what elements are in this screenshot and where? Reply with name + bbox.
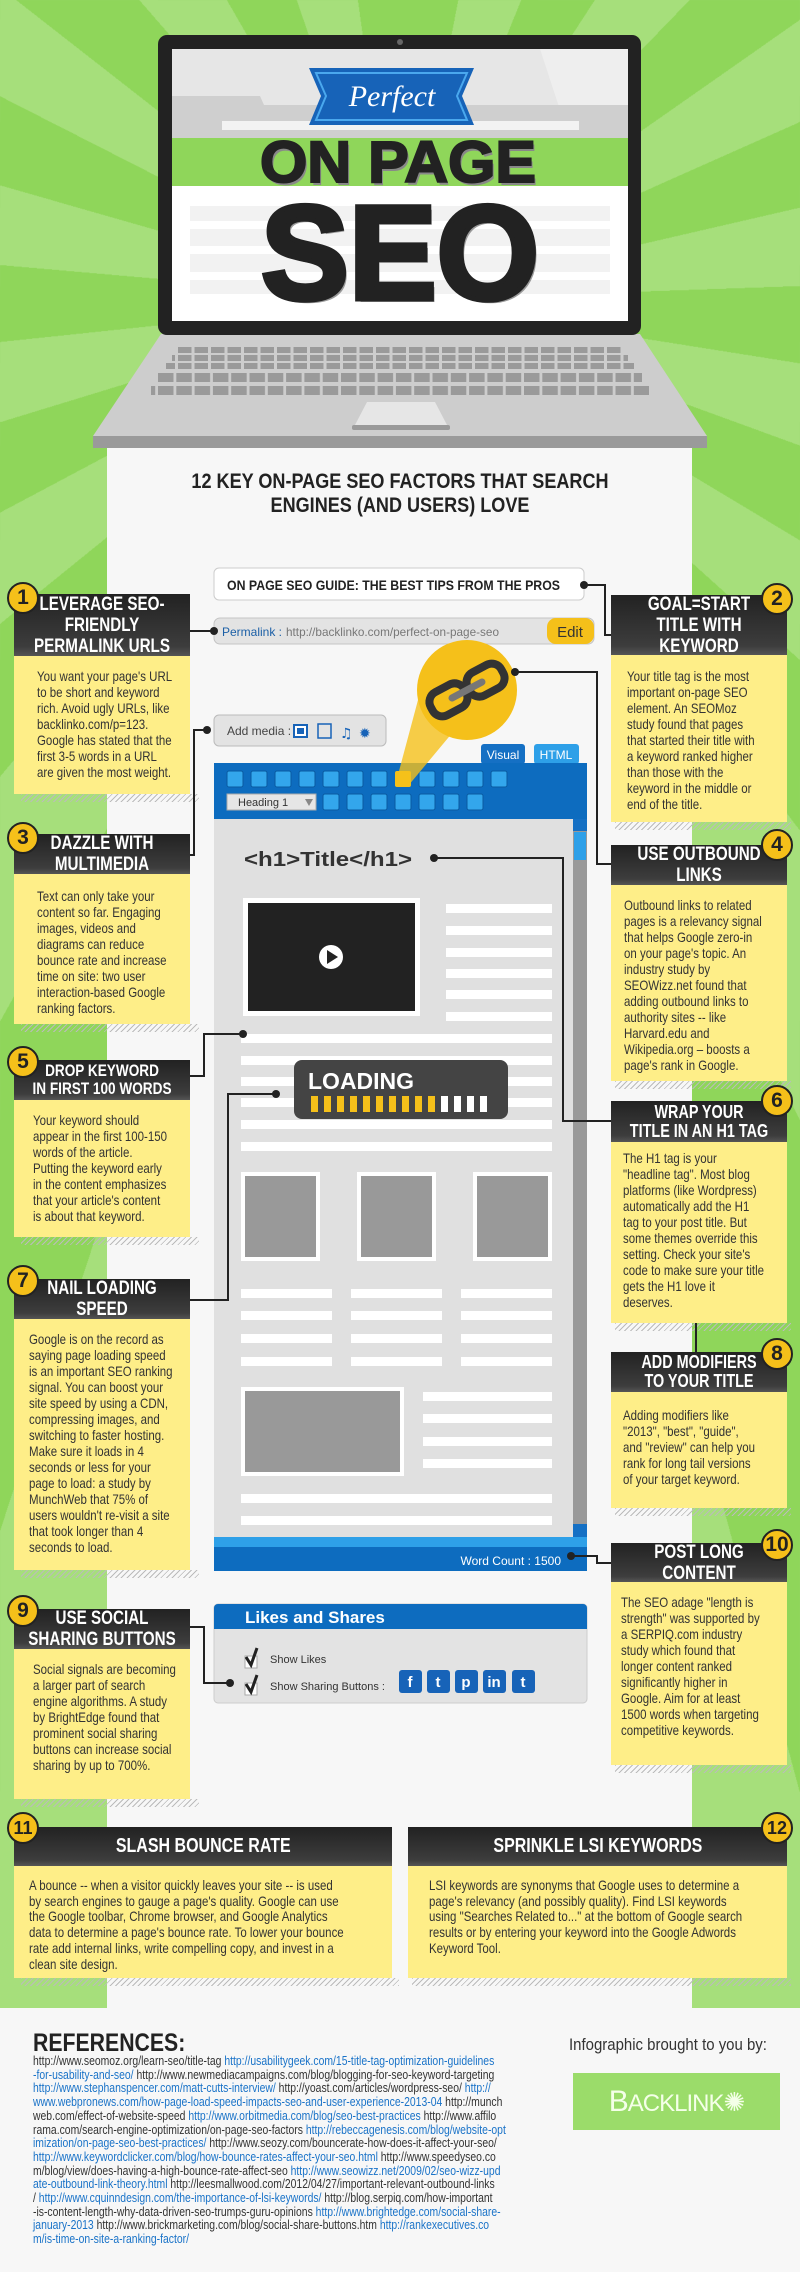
panel 2: title keyword: important on-page SEO — [627, 684, 748, 700]
references list: m/blog/view/does-having-a-high-bounce-rate-affect-seo http://www.seowizz.net/2009/02/seo-wizz-upd — [33, 2163, 500, 2178]
panel 4: outbound links: SEOWizz.net found that — [624, 977, 747, 993]
subtitle: 12 KEY ON-PAGE SEO FACTORS THAT SEARCH — [191, 470, 609, 493]
panel 7: loading speed: 7 — [17, 1269, 29, 1292]
panel 9: social sharing: prominent social sharing — [33, 1725, 157, 1741]
panel 10: long content: The SEO adage "length is — [621, 1594, 753, 1610]
panel 2: title keyword: TITLE WITH — [656, 614, 742, 636]
panel 2: title keyword: that started their title with — [627, 732, 755, 748]
panel 12: LSI keywords: SPRINKLE LSI KEYWORDS — [493, 1835, 702, 1857]
panel 6: h1 tag: deserves. — [623, 1294, 673, 1310]
panel 7: loading speed: switching to faster hosting. — [29, 1427, 164, 1443]
panel 5: keyword first 100 words: that your article's content — [33, 1192, 160, 1208]
likes and shares box: Show Likes — [270, 1654, 327, 1666]
panel 5: keyword first 100 words: words of the article. — [33, 1144, 133, 1160]
panel 1: permalink urls — [7, 582, 199, 802]
panel 3: multimedia: time on site: two user — [37, 968, 145, 984]
panel 7: loading speed: MunchWeb that 75% of — [29, 1491, 148, 1507]
panel 11: bounce rate — [7, 1812, 399, 1986]
title: ON PAGE: ON PAGE — [260, 130, 536, 195]
add media box: Add media : — [227, 724, 291, 738]
panel 7: loading speed: page to load: a study by — [29, 1475, 151, 1491]
panel 3: multimedia: ranking factors. — [37, 1000, 115, 1016]
word count bar: Word Count : 1500 — [460, 1554, 561, 1568]
panel 10: long content: a SERPIQ.com industry — [621, 1626, 742, 1642]
panel 5: keyword first 100 words: in the content emphasizes — [33, 1176, 166, 1192]
references list: -for-usability-and-seo/ http://www.newmediacampaigns.com/blog/blogging-for-seo-keyword-targeting — [33, 2067, 494, 2082]
panel 10: long content: significantly higher in — [621, 1674, 728, 1690]
panel 2: title keyword: than those with the — [627, 764, 723, 780]
panel 12: LSI keywords: page's relevancy (and possibly quality). Find LSI keywords — [429, 1893, 727, 1909]
panel 1: permalink urls: Google has stated that the — [37, 732, 172, 748]
panel 1: permalink urls: to be short and keyword — [37, 684, 160, 700]
panel 1: permalink urls: backlinko.com/p=123. — [37, 716, 148, 732]
word count bar — [214, 1537, 587, 1571]
panel 12: LSI keywords: LSI keywords are synonyms that Google uses to determine a — [429, 1877, 739, 1893]
tabs: HTML — [540, 748, 573, 762]
panel 3: multimedia: 3 — [17, 826, 29, 849]
panel 6: h1 tag: some themes override this — [623, 1230, 758, 1246]
panel 8: modifiers: of your target keyword. — [623, 1471, 740, 1487]
panel 6: h1 tag: gets the H1 love it — [623, 1278, 715, 1294]
panel 11: bounce rate: data to determine a page's bounce rate. To lower your bounce — [29, 1924, 344, 1940]
title: SEO: SEO — [264, 182, 542, 331]
panel 3: multimedia: interaction-based Google — [37, 984, 165, 1000]
panel 2: title keyword: Your title tag is the most — [627, 668, 749, 684]
panel 1: permalink urls: 1 — [17, 586, 29, 609]
loading bar: LOADING — [308, 1068, 414, 1094]
add media box — [214, 715, 386, 746]
panel 10: long content: POST LONG — [654, 1542, 744, 1562]
panel 3: multimedia — [7, 822, 199, 1032]
panel 6: h1 tag: WRAP YOUR — [654, 1102, 744, 1122]
permalink bar: Edit — [557, 624, 584, 641]
editor toolbar — [214, 763, 587, 819]
panel 7: loading speed: saying page loading speed — [29, 1347, 166, 1363]
panel 2: title keyword: keyword in the middle or — [627, 780, 751, 796]
panel 12: LSI keywords — [408, 1812, 793, 1986]
panel 1: permalink urls: rich. Avoid ugly URLs, like — [37, 700, 170, 716]
panel 6: h1 tag: automatically add the H1 — [623, 1198, 749, 1214]
panel 11: bounce rate: 11 — [13, 1818, 33, 1838]
panel 5: keyword first 100 words: 5 — [17, 1050, 29, 1073]
references list — [32, 2053, 506, 2246]
subtitle — [191, 470, 609, 517]
panel 7: loading speed: compressing images, and — [29, 1411, 160, 1427]
panel 5: keyword first 100 words: appear in the first 100-150 — [33, 1128, 167, 1144]
panel 7: loading speed: SPEED — [76, 1299, 128, 1320]
guide title box: ON PAGE SEO GUIDE: THE BEST TIPS FROM THE PROS — [227, 577, 560, 593]
panel 4: outbound links: pages is a relevancy signal — [624, 913, 762, 929]
add media box: ✹ — [359, 726, 371, 742]
panel 6: h1 tag: platforms (like Wordpress) — [623, 1182, 757, 1198]
panel 10: long content — [611, 1529, 793, 1773]
likes and shares box — [214, 1604, 587, 1703]
panel 4: outbound links: LINKS — [676, 865, 722, 886]
panel 3: multimedia: bounce rate and increase — [37, 952, 167, 968]
panel 3: multimedia: diagrams can reduce — [37, 936, 144, 952]
panel 4: outbound links: USE OUTBOUND — [637, 844, 761, 865]
panel 7: loading speed: NAIL LOADING — [47, 1278, 157, 1299]
references section — [0, 2008, 800, 2272]
panel 10: long content: study which found that — [621, 1642, 735, 1658]
panel 4: outbound links: authority sites -- like — [624, 1009, 726, 1025]
laptop base — [93, 334, 707, 448]
panel 4: outbound links: industry study by — [624, 961, 710, 977]
panel 8: modifiers: 8 — [771, 1342, 783, 1365]
panel 10: long content: strength" was supported by — [621, 1610, 760, 1626]
references list: imization/on-page-seo-best-practices/ http://www.seozy.com/bouncerate-how-does-it-affect-your-seo/ — [33, 2135, 497, 2150]
add media box: ♫ — [340, 726, 353, 742]
title: SEO: SEO — [261, 179, 539, 328]
panel 2: title keyword — [611, 583, 793, 830]
references heading: REFERENCES: — [33, 2029, 185, 2057]
permalink bar: Permalink : — [222, 625, 282, 639]
guide title box — [214, 568, 584, 600]
references list: -is-content-length-why-data-driven-seo-trumps-guru-opinions http://www.brightedge.com/social-share- — [33, 2204, 501, 2219]
likes and shares box: p — [461, 1674, 471, 1691]
laptop screen bezel — [158, 35, 641, 335]
laptop illustration — [93, 35, 707, 448]
panel 9: social sharing: USE SOCIAL — [56, 1608, 148, 1629]
panel 8: modifiers — [611, 1338, 793, 1516]
editor content area — [214, 819, 587, 1537]
center paper strip — [107, 440, 692, 2010]
panel 9: social sharing: engine algorithms. A study — [33, 1693, 167, 1709]
panel 9: social sharing: by BrightEdge found that — [33, 1709, 159, 1725]
panel 12: LSI keywords: using "Searches Related to..." at the bottom of Google search — [429, 1908, 742, 1924]
backlinko logo — [573, 2073, 780, 2130]
panel 11: bounce rate: clean site design. — [29, 1956, 118, 1972]
panel 3: multimedia: MULTIMEDIA — [55, 854, 149, 875]
references list: http://www.keywordclicker.com/blog/how-bounce-rates-affect-your-seo.html http://www.speedyseo.co — [33, 2149, 496, 2164]
panel 7: loading speed: that took longer than 4 — [29, 1523, 143, 1539]
link pin callout — [395, 640, 517, 786]
panel 6: h1 tag: 6 — [771, 1089, 783, 1112]
references list: rama.com/search-engine-optimization/on-page-seo-factors http://rebeccagenesis.com/blog/website-opt — [33, 2122, 506, 2137]
banner: Perfect: Perfect — [348, 80, 436, 113]
panel 8: modifiers: and "review" can help you — [623, 1439, 755, 1455]
panel 7: loading speed: seconds to load. — [29, 1539, 113, 1555]
panel 8: modifiers: "2013", "best", "guide", — [623, 1423, 739, 1439]
likes and shares box: t — [436, 1674, 440, 1691]
panel 9: social sharing: Social signals are becoming — [33, 1661, 176, 1677]
panel 6: h1 tag: The H1 tag is your — [623, 1150, 717, 1166]
panel 7: loading speed: site speed by using a CDN, — [29, 1395, 168, 1411]
panel 5: keyword first 100 words — [7, 1046, 199, 1245]
panel 1: permalink urls: first 3-5 words in a URL — [37, 748, 157, 764]
references list: january-2013 http://www.brickmarketing.com/blog/social-share-buttons.htm http://rankexecutives.co — [33, 2217, 489, 2232]
panel 11: bounce rate: by search engines to gauge a page's quality. Google can use — [29, 1893, 339, 1909]
panel 7: loading speed: seconds or less for your — [29, 1459, 151, 1475]
tabs: Visual — [487, 748, 519, 762]
panel 10: long content: Google. Aim for at least — [621, 1690, 740, 1706]
permalink bar: http://backlinko.com/perfect-on-page-seo — [286, 625, 499, 639]
panel 1: permalink urls: FRIENDLY — [65, 614, 139, 636]
title: ON PAGE: ON PAGE — [262, 133, 538, 198]
editor content area: <h1>Title</h1> — [244, 849, 412, 871]
panel 6: h1 tag: tag to your post title. But — [623, 1214, 747, 1230]
panel 6: h1 tag: code to make sure your title — [623, 1262, 764, 1278]
panel 2: title keyword: 2 — [771, 587, 783, 610]
likes and shares box: in — [487, 1674, 501, 1691]
panel 9: social sharing: buttons can increase social — [33, 1741, 171, 1757]
likes and shares box: Show Sharing Buttons : — [270, 1681, 385, 1693]
references list: http://www.stephanspencer.com/matt-cutts-interview/ http://yoast.com/articles/wordpress-seo/ http:// — [33, 2080, 491, 2095]
panel 3: multimedia: Text can only take your — [37, 888, 154, 904]
panel 5: keyword first 100 words: Putting the keyword early — [33, 1160, 162, 1176]
panel 9: social sharing — [7, 1595, 199, 1807]
references list: / http://www.cquinndesign.com/the-importance-of-lsi-keywords/ http://blog.serpiq.com/how-important — [33, 2190, 493, 2205]
panel 10: long content: longer content ranked — [621, 1658, 732, 1674]
panel 6: h1 tag: TITLE IN AN H1 TAG — [630, 1120, 768, 1140]
panel 4: outbound links: that helps Google zero-in — [624, 929, 752, 945]
panel 2: title keyword: a keyword ranked higher — [627, 748, 753, 764]
panel 10: long content: competitive keywords. — [621, 1722, 734, 1738]
panel 7: loading speed: is an important SEO ranking — [29, 1363, 173, 1379]
panel 6: h1 tag: "headline tag". Most blog — [623, 1166, 750, 1182]
credit text: Infographic brought to you by: — [569, 2035, 767, 2054]
panel 4: outbound links: Wikipedia.org – boosts a — [624, 1041, 750, 1057]
panel 10: long content: 1500 words when targeting — [621, 1706, 759, 1722]
panel 11: bounce rate: A bounce -- when a visitor quickly leaves your site -- is used — [29, 1877, 333, 1893]
panel 4: outbound links: adding outbound links to — [624, 993, 748, 1009]
references list: www.webpronews.com/how-page-load-speed-impacts-seo-and-user-experience-2013-04 http://munch — [33, 2094, 502, 2109]
panel 8: modifiers: ADD MODIFIERS — [641, 1352, 757, 1372]
panel 4: outbound links: Harvard.edu and — [624, 1025, 710, 1041]
panel 11: bounce rate: rate add internal links, write compelling copy, and invest in a — [29, 1940, 334, 1956]
panel 1: permalink urls: are given the most weight. — [37, 764, 171, 780]
panel 10: long content: 10 — [765, 1533, 789, 1556]
panel 2: title keyword: GOAL=START — [648, 594, 750, 614]
panel 4: outbound links: 4 — [771, 833, 783, 856]
panel 1: permalink urls: You want your page's URL — [37, 668, 172, 684]
backlinko logo: BACKLINK✺ — [609, 2085, 744, 2118]
references list: web.com/effect-of-website-speed http://www.orbitmedia.com/blog/seo-best-practices http://www.affilo — [33, 2108, 496, 2123]
panel 6: h1 tag — [611, 1085, 793, 1331]
panel 2: title keyword: study found that pages — [627, 716, 743, 732]
panel 8: modifiers: TO YOUR TITLE — [644, 1371, 754, 1391]
likes and shares box: Likes and Shares — [245, 1608, 385, 1627]
panel 6: h1 tag: setting. Check your site's — [623, 1246, 750, 1262]
panel 1: permalink urls: PERMALINK URLS — [34, 636, 170, 656]
panel 9: social sharing: SHARING BUTTONS — [28, 1629, 176, 1650]
panel 12: LSI keywords: 12 — [767, 1818, 787, 1838]
panel 9: social sharing: a larger part of search — [33, 1677, 145, 1693]
panel 4: outbound links: on your page's topic. An — [624, 945, 746, 961]
panel 8: modifiers: Adding modifiers like — [623, 1407, 729, 1423]
references list: m/is-time-on-site-a-ranking-factor/ — [33, 2231, 189, 2246]
panel 11: bounce rate: SLASH BOUNCE RATE — [116, 1835, 290, 1857]
panel 7: loading speed: users wouldn't re-visit a site — [29, 1507, 170, 1523]
panel 9: social sharing: sharing by up to 700%. — [33, 1757, 150, 1773]
panel 8: modifiers: rank for long tail versions — [623, 1455, 751, 1471]
panel 5: keyword first 100 words: Your keyword should — [33, 1112, 139, 1128]
panel 2: title keyword: element. An SEOMoz — [627, 700, 737, 716]
references list: http://www.seomoz.org/learn-seo/title-tag http://usabilitygeek.com/15-title-tag-optimization-guidelines — [33, 2053, 494, 2068]
panel 12: LSI keywords: Keyword Tool. — [429, 1940, 501, 1956]
panel 7: loading speed: Make sure it loads in 4 — [29, 1443, 144, 1459]
panel 7: loading speed: Google is on the record as — [29, 1331, 164, 1347]
panel 3: multimedia: images, videos and — [37, 920, 136, 936]
panel 1: permalink urls: LEVERAGE SEO- — [40, 594, 164, 614]
panel 4: outbound links: page's rank in Google. — [624, 1057, 739, 1073]
panel 4: outbound links — [611, 829, 793, 1089]
panel 5: keyword first 100 words: is about that keyword. — [33, 1208, 145, 1224]
panel 7: loading speed: signal. You can boost your — [29, 1379, 163, 1395]
panel 2: title keyword: end of the title. — [627, 796, 702, 812]
banner: Perfect — [309, 68, 474, 125]
subtitle: ENGINES (AND USERS) LOVE — [271, 494, 529, 517]
panel 10: long content: CONTENT — [662, 1562, 736, 1584]
panel 9: social sharing: 9 — [17, 1599, 29, 1622]
panel 5: keyword first 100 words: DROP KEYWORD — [45, 1061, 159, 1080]
panel 5: keyword first 100 words: IN FIRST 100 WORDS — [32, 1079, 172, 1098]
panel 7: loading speed — [7, 1265, 199, 1578]
panel 11: bounce rate: the Google toolbar, Chrome browser, and Google Analytics — [29, 1908, 328, 1924]
panel 3: multimedia: DAZZLE WITH — [50, 833, 153, 854]
panel 2: title keyword: KEYWORD — [659, 636, 739, 656]
loading bar — [294, 1060, 508, 1119]
permalink bar — [214, 618, 594, 644]
editor toolbar: Heading 1 — [238, 797, 288, 809]
panel 3: multimedia: content so far. Engaging — [37, 904, 161, 920]
panel 4: outbound links: Outbound links to related — [624, 897, 752, 913]
references list: ate-outbound-link-theory.html http://leesmallwood.com/2012/04/27/important-relevant-outbound-links — [33, 2176, 495, 2191]
likes and shares box: f — [408, 1674, 414, 1691]
likes and shares box: t — [520, 1674, 526, 1691]
panel 12: LSI keywords: results or by entering your keyword into the Google Adwords — [429, 1924, 736, 1940]
tabs — [481, 744, 579, 764]
